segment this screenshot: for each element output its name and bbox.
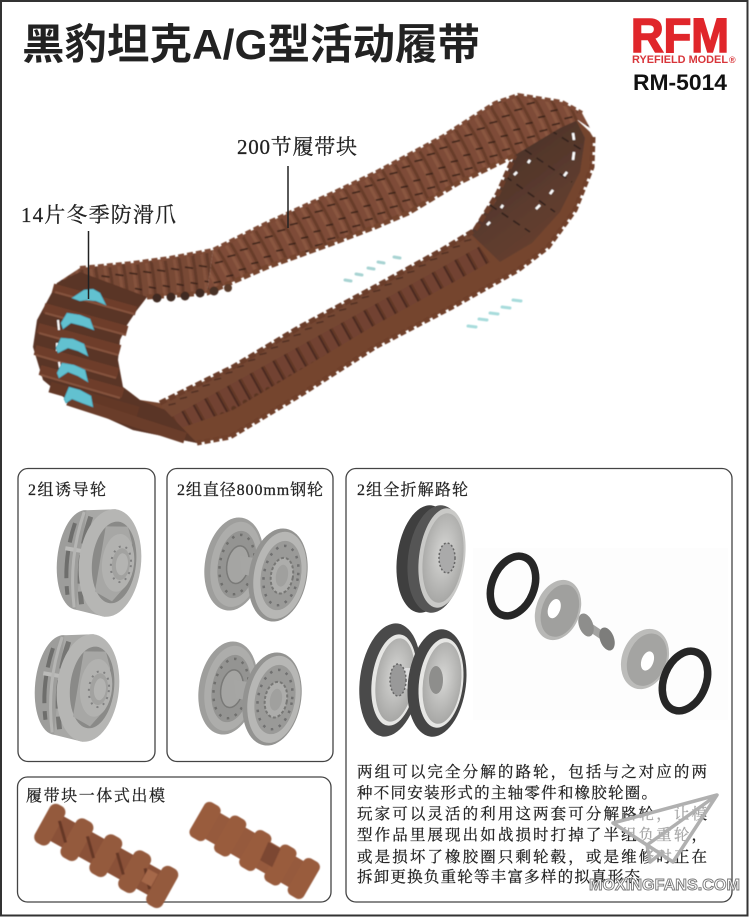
axle (575, 611, 618, 653)
brand logo: ® (729, 55, 736, 65)
watermark (589, 795, 740, 894)
label: winter cleats: 14片冬季防滑爪 (21, 203, 176, 227)
description text: 型作品里展现出如战损时打掉了半组负重轮， (357, 826, 707, 844)
exploded view (473, 548, 728, 720)
description text: 种不同安装形式的主轴零件和橡胶轮圈。 (357, 784, 657, 802)
track link left (32, 801, 181, 911)
description text: 拆卸更换负重轮等丰富多样的拟真形态 (357, 867, 640, 886)
steel wheel pair lower (191, 637, 309, 750)
icon: paper plane (613, 795, 717, 862)
heading: steel wheels: 2组直径800mm钢轮 (177, 481, 323, 499)
heading: idler wheels: 2组诱导轮 (28, 481, 106, 499)
description text (357, 763, 707, 886)
panel: fully removable road wheels (346, 468, 732, 902)
steel wheel pair upper (197, 513, 315, 626)
label: track blocks: 200节履带块 (237, 135, 357, 159)
track illustration (33, 95, 593, 443)
lower belt and far loop (50, 118, 593, 443)
brand logo: RFM (631, 10, 729, 63)
front loop (33, 272, 197, 443)
panel: steel wheels (167, 468, 333, 762)
wheel disc left (527, 573, 589, 647)
heading: road wheels: 2组全折解路轮 (357, 481, 468, 499)
rubber ring left (482, 549, 544, 623)
idler wheel upper (52, 504, 146, 620)
rubber-tyred wheel pair (352, 619, 472, 741)
heading: track link moulding: 履带块一体式出模 (26, 786, 165, 805)
leader line: track blocks (287, 166, 289, 228)
icon: loose pins lower group (468, 300, 521, 327)
idler wheel lower (30, 629, 124, 745)
leader line: winter cleats (88, 231, 90, 299)
rubber-tyred wheel single (391, 502, 471, 616)
product code: RM-5014 (633, 70, 728, 95)
icon: loose pins upper group (345, 257, 400, 281)
brand logo: RYEFIELD MODEL (632, 54, 728, 66)
rubber ring right (654, 644, 716, 718)
panel: idler wheels (18, 468, 155, 762)
description text: 或是损坏了橡胶圈只剩轮毂，或是维修时正在 (357, 848, 707, 866)
title: 黑豹坦克A/G型活动履带 (22, 21, 480, 68)
track link right (187, 799, 322, 901)
description text: 两组可以完全分解的路轮，包括与之对应的两 (357, 763, 707, 781)
icon: teal winter cleats (56, 289, 106, 407)
wheel disc right (613, 622, 677, 696)
description text: 玩家可以灵活的利用这两套可分解路轮，让模 (357, 804, 707, 823)
panel: track link moulding (18, 777, 331, 911)
watermark text: MOXINGFANS.COM (589, 877, 740, 894)
upper belt (55, 95, 590, 310)
